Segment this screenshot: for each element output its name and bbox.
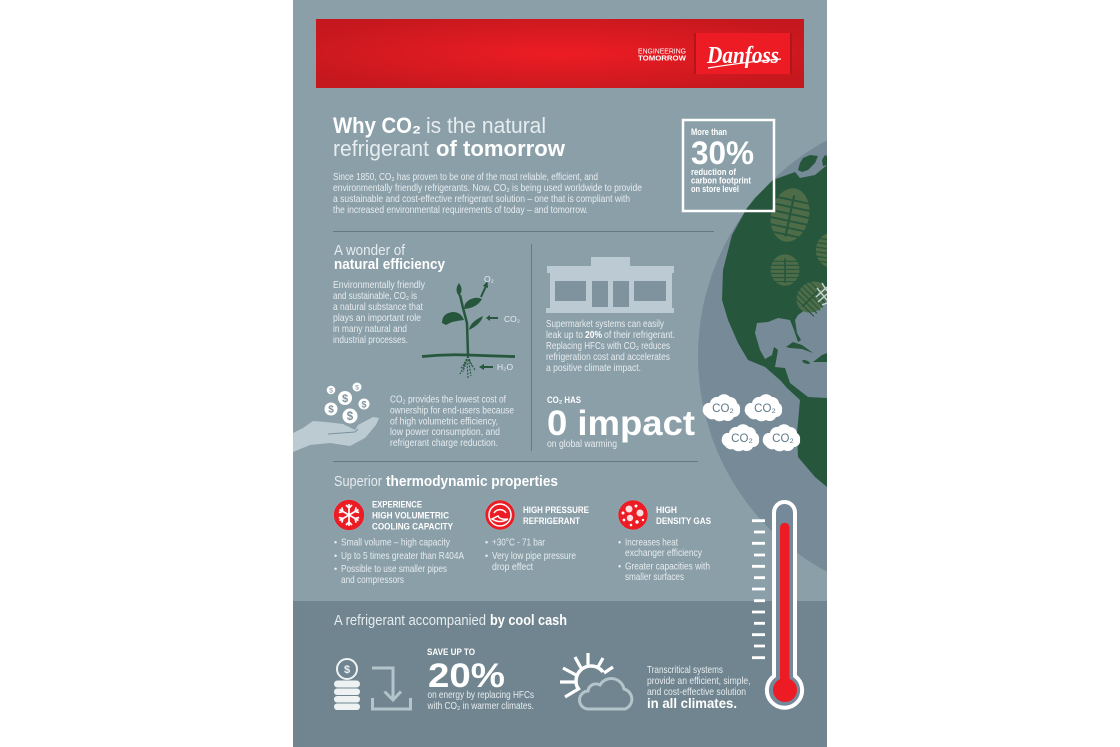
icon: hand holding coins: $ — [347, 411, 354, 423]
bullet list: cooling capacity: Small volume – high capacity — [341, 538, 451, 548]
bullet list: high pressure — [485, 538, 576, 573]
cost of ownership paragraph — [390, 394, 514, 449]
heading: high pressure refrigerant: REFRIGERANT — [523, 516, 580, 526]
natural substance paragraph: in many natural and — [333, 324, 407, 335]
bullet list: cooling capacity: • — [334, 551, 337, 561]
bullet list: high density: exchanger efficiency — [625, 548, 703, 559]
supermarket paragraph: refrigeration cost and accelerates — [546, 352, 670, 363]
poster background — [293, 0, 827, 601]
icon: CO2 clouds: CO₂ — [731, 433, 753, 445]
bullet list: high density: Greater capacities with — [625, 562, 710, 572]
heading: volumetric cooling capacity: HIGH VOLUMETRIC — [372, 510, 449, 520]
title: refrigerant — [333, 136, 430, 161]
icon: dense snow crystals — [618, 500, 648, 530]
heading: high density gas: HIGH — [656, 505, 677, 515]
icon: plant with gas exchange: O₂ — [484, 274, 494, 284]
supermarket paragraph: leak up to — [546, 330, 583, 341]
callout: 0 impact — [547, 395, 695, 450]
cost of ownership paragraph: CO₂ provides the lowest cost of — [390, 394, 506, 406]
cost of ownership paragraph: low power consumption, and — [390, 427, 500, 438]
tagline — [638, 48, 686, 60]
heading: high density gas: DENSITY GAS — [656, 516, 711, 526]
icon: CO2 clouds — [703, 394, 800, 451]
Danfoss logo: Danfoss — [706, 43, 779, 69]
callout: 0 impact: CO₂ HAS — [547, 395, 581, 405]
cost of ownership paragraph: ownership for end-users because — [390, 406, 514, 416]
callout: 30% reduction: on store level — [691, 184, 739, 194]
callout: 30% reduction: carbon footprint — [691, 176, 751, 186]
heading: natural efficiency — [334, 243, 445, 273]
icon: download arrow — [372, 668, 410, 709]
icon: hand holding coins: $ — [342, 393, 348, 405]
icon: supermarket — [546, 257, 674, 313]
intro paragraph: Since 1850, CO₂ has proven to be one of the most reliable, efficient, and — [333, 172, 598, 183]
natural substance paragraph: Environmentally friendly — [333, 280, 426, 291]
heading: thermodynamic properties: thermodynamic properties — [386, 474, 558, 490]
icon: CO2 clouds: CO₂ — [712, 403, 734, 415]
bullet list: cooling capacity: Possible to use smaller pipes — [341, 564, 447, 575]
icon: hand holding coins: $ — [361, 400, 367, 410]
callout: 30% reduction: reduction of — [691, 167, 736, 177]
bullet list: high density: • — [618, 562, 621, 572]
bullet list: cooling capacity — [334, 538, 464, 586]
callout: 30% reduction: 30% — [691, 135, 754, 171]
carbon footprints on the globe — [770, 188, 827, 317]
transcritical systems paragraph: in all climates. — [647, 696, 737, 711]
bottom band background — [293, 601, 827, 747]
save up to 20% — [427, 647, 534, 712]
transcritical systems paragraph: and cost-effective solution — [647, 687, 746, 698]
bullet list: high density — [618, 538, 710, 583]
tagline: TOMORROW — [638, 54, 687, 62]
supermarket paragraph — [546, 319, 675, 374]
heading: high pressure refrigerant — [524, 506, 589, 524]
icon: CO2 clouds: CO₂ — [772, 433, 794, 445]
Danfoss logo — [694, 33, 792, 74]
icon: hand holding coins: $ — [355, 384, 359, 392]
intro paragraph: the increased environmental requirements of today – and tomorrow. — [333, 205, 588, 216]
icon: coin stack: $ — [344, 664, 350, 676]
heading: thermodynamic properties: Superior — [334, 474, 382, 490]
heading: thermodynamic properties — [334, 475, 558, 489]
icon: hand holding coins — [293, 382, 379, 452]
save up to 20%: with CO₂ in warmer climates. — [427, 701, 534, 712]
intro paragraph: environmentally friendly refrigerants. Now, CO₂ is being used worldwide to provide — [333, 183, 642, 194]
intro paragraph: a sustainable and cost-effective refrigerant solution – one that is compliant with — [333, 194, 630, 205]
bullet list: high density: • — [618, 538, 621, 548]
supermarket paragraph: Supermarket systems can easily — [546, 319, 665, 330]
heading: volumetric cooling capacity: EXPERIENCE — [372, 500, 422, 510]
title: of tomorrow — [436, 136, 565, 161]
callout: 30% reduction — [683, 120, 774, 211]
supermarket paragraph: Replacing HFCs with CO₂ reduces — [546, 341, 670, 352]
icon: pressure gauge — [485, 500, 515, 530]
intro paragraph — [333, 172, 642, 216]
heading: cool cash — [334, 614, 566, 628]
bullet list: high density: Increases heat — [625, 538, 678, 548]
bullet list: high pressure: Very low pipe pressure — [492, 551, 576, 562]
transcritical systems paragraph: provide an efficient, simple, — [647, 676, 750, 687]
icon: coin stack — [334, 659, 360, 710]
heading: cool cash: A refrigerant accompanied — [334, 613, 486, 629]
bullet list: high pressure: • — [485, 538, 488, 548]
natural substance paragraph: and sustainable, CO₂ is — [333, 291, 417, 302]
header banner — [316, 19, 804, 88]
icon: plant with gas exchange — [422, 274, 520, 378]
tagline: ENGINEERING — [638, 46, 686, 56]
heading: high pressure refrigerant: HIGH PRESSURE — [523, 505, 589, 515]
heading: cool cash: by cool cash — [490, 613, 567, 629]
title: is the natural — [426, 113, 546, 138]
bullet list: high pressure: drop effect — [492, 562, 533, 573]
thermometer — [752, 502, 802, 708]
icon: plant with gas exchange: CO₂ — [504, 314, 520, 324]
natural substance paragraph — [333, 280, 426, 346]
heading: volumetric cooling capacity — [372, 501, 453, 530]
bullet list: high pressure: +30°C - 71 bar — [492, 538, 545, 548]
heading: volumetric cooling capacity: COOLING CAPACITY — [372, 522, 453, 532]
natural substance paragraph: a natural substance that — [333, 302, 423, 313]
bullet list: cooling capacity: Up to 5 times greater than R404A — [341, 551, 464, 562]
icon: snowflake — [334, 500, 364, 530]
transcritical systems paragraph — [647, 665, 750, 711]
icon: CO2 clouds: CO₂ — [754, 403, 776, 415]
callout: 0 impact: 0 impact — [547, 404, 695, 443]
callout: 30% reduction: More than — [691, 127, 727, 137]
cost of ownership paragraph: of high volumetric efficiency, — [390, 416, 498, 428]
natural substance paragraph: industrial processes. — [333, 335, 408, 346]
natural substance paragraph: plays an important role — [333, 313, 421, 324]
transcritical systems paragraph: Transcritical systems — [647, 665, 723, 676]
globe atmosphere halo — [698, 140, 827, 572]
bullet list: high density: smaller surfaces — [625, 572, 684, 583]
callout: 0 impact: on global warming — [547, 439, 617, 450]
icon: plant with gas exchange: H₂O — [497, 362, 513, 372]
icon: sun and cloud — [560, 653, 632, 709]
heading: natural efficiency: natural efficiency — [334, 257, 445, 273]
icon: hand holding coins: $ — [328, 404, 334, 416]
supermarket paragraph: 20% — [585, 330, 602, 341]
heading: natural efficiency: A wonder of — [334, 243, 406, 259]
icon: hand holding coins: $ — [329, 388, 333, 394]
cost of ownership paragraph: refrigerant charge reduction. — [390, 438, 498, 449]
title: Why CO₂ — [333, 113, 421, 138]
bullet list: cooling capacity: • — [334, 538, 337, 548]
supermarket paragraph: of their refrigerant. — [604, 330, 675, 341]
save up to 20%: 20% — [428, 657, 505, 695]
title — [333, 113, 565, 161]
save up to 20%: SAVE UP TO — [427, 647, 475, 657]
heading: high density gas — [656, 506, 711, 524]
bullet list: cooling capacity: and compressors — [341, 575, 404, 586]
globe land masses — [722, 155, 827, 487]
bullet list: cooling capacity: • — [334, 564, 337, 574]
supermarket paragraph: a positive climate impact. — [546, 363, 641, 374]
save up to 20%: on energy by replacing HFCs — [428, 690, 534, 701]
bullet list: high pressure: • — [485, 551, 488, 561]
